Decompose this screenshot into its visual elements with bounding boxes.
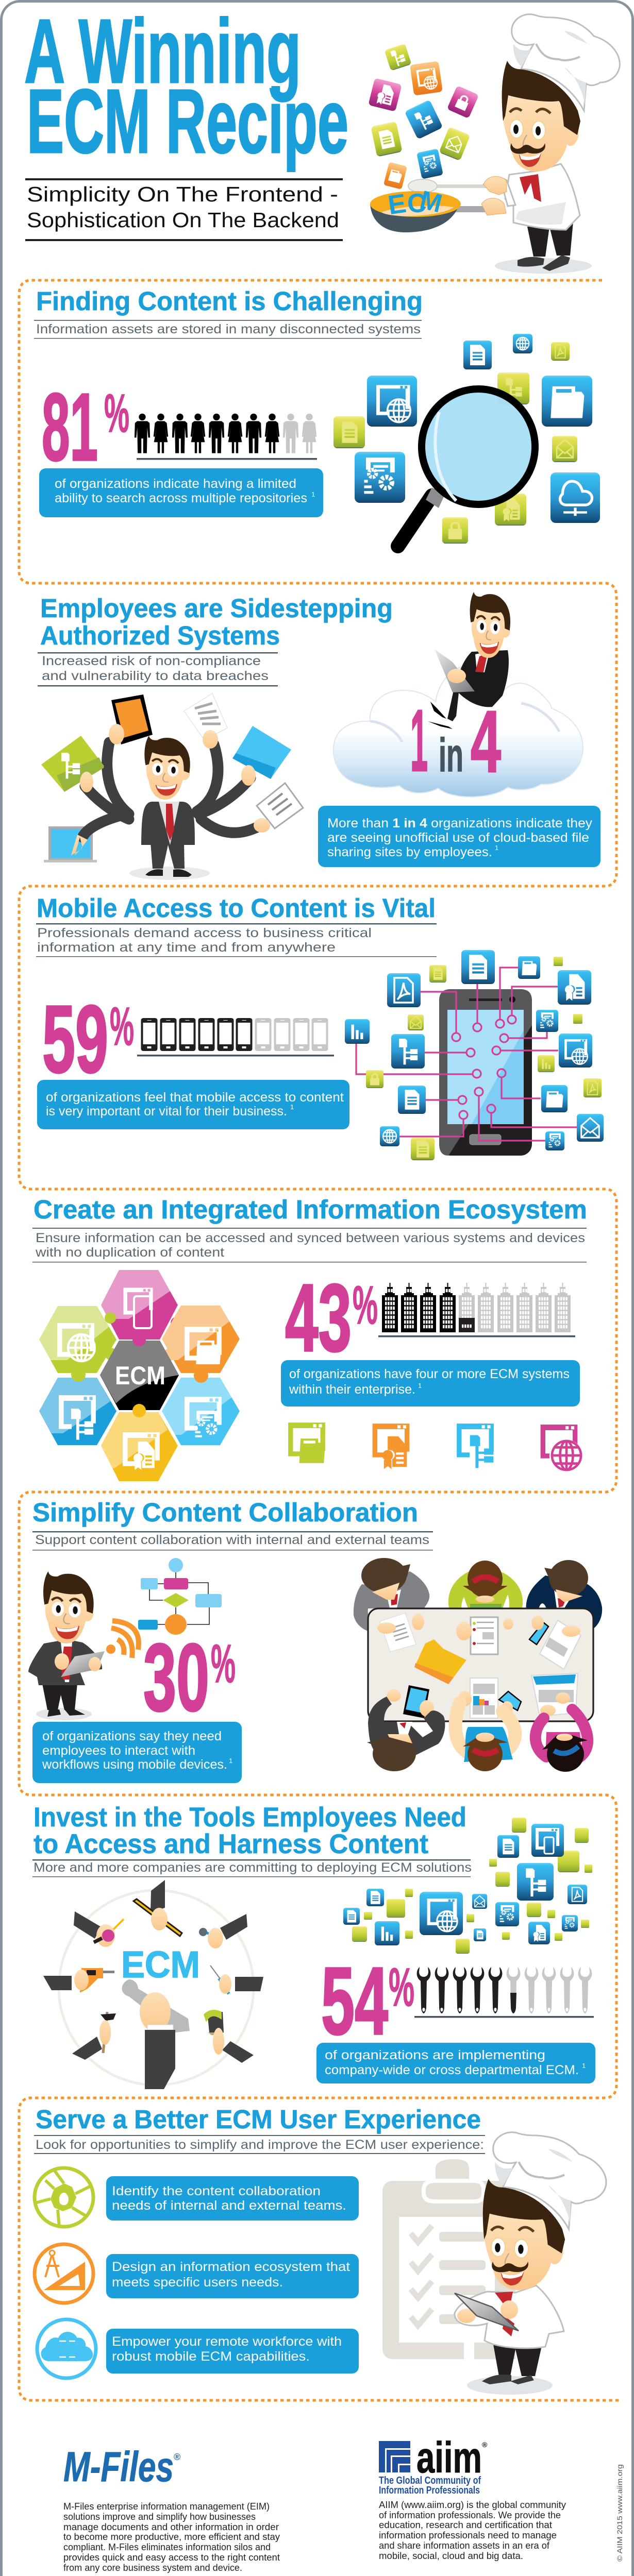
callout: Identify the content collaboration: [112, 2184, 321, 2198]
logo: AIIM: ®: [482, 2441, 488, 2449]
callout: employees to interact with: [42, 1743, 195, 1758]
text block: M-Files description: compliant. M-Files eliminates information silos and: [63, 2541, 271, 2552]
stat: 59 percent: 59: [42, 986, 108, 1093]
diagram: ECM tools circle: ECM: [121, 1944, 200, 1986]
subheading: [32, 1228, 587, 1262]
icon cluster: [343, 1818, 592, 1954]
text block: AIIM description: [379, 2499, 566, 2561]
person: pink top: [536, 1709, 588, 1772]
tool: paint brush: [204, 2010, 254, 2063]
subheading: Information assets are stored in many disconnected systems: [36, 322, 421, 336]
stat: 1 in 4: in: [439, 729, 463, 782]
subheading: and vulnerability to data breaches: [42, 669, 269, 683]
subheading: Ensure information can be accessed and synced between various systems and devices: [36, 1231, 585, 1245]
icon: chef cooking ECM: [368, 14, 620, 274]
subheading: information at any time and from anywhere: [37, 940, 336, 955]
text block: M-Files description: from any core business system and device.: [63, 2562, 242, 2573]
heading: to Access and Harness Content: [34, 1829, 428, 1859]
title: ECM Recipe: [27, 71, 348, 172]
icon: cloud: [37, 2319, 96, 2378]
text block: AIIM description: information professionals need to manage: [379, 2530, 557, 2540]
logo: M-Files: M-Files: [63, 2444, 174, 2490]
callout: Design an information ecosystem that: [112, 2260, 350, 2274]
heading: Serve a Better ECM User Experience: [36, 2105, 481, 2134]
callout: robust mobile ECM capabilities.: [112, 2349, 310, 2364]
hands on table: [377, 1614, 580, 1717]
panel: finding content: [34, 286, 600, 546]
callout: [281, 1360, 580, 1406]
person: gray suit: [354, 1558, 429, 1634]
callout: 1: [418, 1382, 422, 1389]
subtitle: [25, 178, 343, 241]
tool: screwdriver: [210, 1965, 263, 1994]
callout: 1: [495, 844, 498, 852]
icon: checklist clipboard: [382, 2159, 515, 2359]
text block: M-Files description: to become more productive, more efficient and stay: [63, 2531, 280, 2542]
subheading: [36, 923, 437, 957]
tool: level: [134, 1880, 182, 1936]
icon tiles around phone: [345, 950, 604, 1160]
subheading: Look for opportunities to simplify and improve the ECM user experience:: [36, 2138, 484, 2152]
text block: M-Files description: [63, 2501, 280, 2573]
icon: multitasking employee: [41, 693, 303, 880]
stat: 1 in 4: 4: [471, 693, 501, 791]
callout: is very important or vital for their business.: [46, 1104, 287, 1118]
hexagon: blue org chart: [39, 1367, 116, 1445]
wrenches pictogram 5.4 of 10: [414, 1967, 594, 2018]
subheading: [38, 652, 278, 686]
person: dark suit: [367, 1697, 445, 1771]
icon: chef with tablet: [455, 2132, 606, 2395]
person: navy suit: [526, 1560, 602, 1635]
callout: [316, 2043, 595, 2083]
heading: Finding Content is Challenging: [36, 286, 423, 316]
subheading: Increased risk of non-compliance: [42, 654, 261, 668]
callout: [106, 2254, 359, 2298]
subtitle: Sophistication On The Backend: [27, 208, 339, 232]
callout: [32, 1722, 242, 1783]
callout: [318, 806, 600, 867]
stat: 43 percent: %: [353, 1275, 378, 1335]
stat: 43 percent: 43: [285, 1265, 352, 1371]
text block: AIIM description: of information professionals. We provide the: [379, 2510, 561, 2520]
heading: [40, 594, 393, 650]
dotted serpentine section border: [19, 280, 622, 2400]
callout: sharing sites by employees.: [327, 845, 492, 859]
callout: of organizations feel that mobile access to content: [46, 1090, 344, 1105]
stat: 54 percent: %: [389, 1957, 414, 2018]
callout: of organizations indicate having a limited: [55, 477, 296, 491]
callout: of organizations are implementing: [325, 2048, 545, 2062]
hexagon: yellow certificate: [101, 1404, 178, 1481]
hexagon: green globe: [39, 1306, 117, 1373]
subtitle: Simplicity On The Frontend -: [27, 182, 338, 206]
callout: More than 1 in 4 organizations indicate they: [327, 816, 593, 831]
icon: man with tablet: [28, 1571, 139, 1720]
icon: chef cooking ECM: M: [417, 185, 445, 218]
stat: 54 percent: 54: [321, 1948, 388, 2055]
logo: AIIM: aiim: [416, 2433, 482, 2482]
hexagon: light blue gears: [162, 1368, 240, 1445]
hexagon: orange folder: [162, 1306, 240, 1373]
heading: Create an Integrated Information Ecosystem: [34, 1195, 587, 1224]
text block: M-Files description: solutions improve and simplify how businesses: [63, 2511, 256, 2522]
heading: Invest in the Tools Employees Need: [34, 1802, 466, 1833]
hexagon: central ECM: [100, 1333, 179, 1410]
panel: simplify collaboration: [28, 1498, 602, 1783]
title: [24, 1, 348, 172]
callout: 1: [229, 1757, 232, 1765]
text block: AIIM description: and share information assets in an era of: [379, 2540, 550, 2551]
person: green top: [448, 1561, 523, 1625]
people pictogram 8 of 10: [135, 414, 317, 460]
callout: of organizations have four or more ECM systems: [289, 1367, 570, 1381]
panel: invest in tools: [32, 1802, 595, 2089]
callout: ability to search across multiple repositories: [55, 491, 307, 505]
table items: [380, 1613, 581, 1718]
panel: integrated ecosystem: [32, 1195, 587, 1481]
subheading: Professionals demand access to business critical: [37, 926, 372, 940]
callout: workflows using mobile devices.: [42, 1757, 227, 1772]
logo: AIIM: Information Professionals: [379, 2485, 480, 2496]
hexagon: pink mobile: [101, 1270, 183, 1340]
logo: M-Files: ®: [174, 2452, 180, 2462]
heading: Simplify Content Collaboration: [32, 1498, 418, 1527]
icon: connected smartphone: [345, 950, 604, 1160]
diagram: ECM hexagon puzzle: [39, 1270, 240, 1481]
icon: chef cooking ECM: C: [407, 188, 427, 219]
stat: 30 percent: 30: [143, 1624, 209, 1731]
stat: 81 percent: %: [104, 383, 129, 444]
diagram: ECM tools circle: [43, 1880, 263, 2089]
heading: Authorized Systems: [40, 621, 280, 650]
icon row: [288, 1422, 582, 1472]
callout: meets specific users needs.: [112, 2275, 283, 2290]
callout: 1: [311, 490, 315, 498]
title: A Winning: [24, 1, 301, 102]
callout: 1: [582, 2062, 586, 2070]
heading: Employees are Sidestepping: [40, 594, 393, 623]
logo: AIIM: The Global Community of: [379, 2475, 481, 2486]
diagram: workflow: [138, 1558, 222, 1635]
tool: pliers: [199, 1914, 247, 1948]
copyright note: © AIIM 2015 www.aiim.org: [615, 2464, 624, 2562]
callout: [39, 468, 323, 517]
buildings pictogram 4.3 of 10: [378, 1283, 575, 1337]
text block: M-Files description: M-Files enterprise information management (EIM): [63, 2501, 270, 2512]
text block: M-Files description: provides quick and easy access to the right content: [63, 2552, 280, 2563]
text block: M-Files description: manage documents and other information in order: [63, 2521, 279, 2532]
callout: needs of internal and external teams.: [112, 2198, 346, 2213]
tool: drill: [43, 1968, 114, 1993]
callout: within their enterprise.: [289, 1382, 415, 1397]
panel: mobile access: [36, 893, 604, 1160]
tool: wrench: [122, 1979, 190, 2089]
logo: AIIM: [379, 2433, 488, 2496]
heading: [34, 1802, 466, 1859]
icon: chef cooking ECM: E: [386, 189, 408, 221]
subheading: with no duplication of content: [35, 1245, 224, 1260]
person: blue top: [456, 1703, 515, 1771]
icon: tiles and magnifier: [333, 334, 600, 546]
icon: collaboration wheel: [35, 2168, 93, 2227]
callout: are seeing unofficial use of cloud-based file: [327, 831, 589, 845]
subheading: More and more companies are committing to deploying ECM solutions: [34, 1860, 472, 1875]
stat: 1 in 4: 1: [410, 692, 428, 790]
icon: design tools: [35, 2244, 93, 2303]
text block: AIIM description: AIIM (www.aiim.org) is the global community: [379, 2499, 566, 2510]
icon: team meeting top view: [354, 1558, 602, 1772]
stat: 1 in 4: [410, 692, 501, 791]
stat: 59 percent: %: [110, 996, 134, 1057]
callout: [106, 2329, 359, 2374]
callout: [106, 2176, 359, 2221]
heading: Mobile Access to Content is Vital: [37, 893, 436, 923]
text block: AIIM description: education, research and certification that: [379, 2519, 552, 2530]
text block: AIIM description: mobile, social, cloud and big data.: [379, 2550, 523, 2561]
hexagon: central ECM: ECM: [115, 1361, 165, 1390]
floating icons: [368, 44, 479, 190]
icon: cloud with laptop user: [333, 592, 583, 797]
callout: company-wide or cross departmental ECM.: [325, 2063, 579, 2077]
callout: of organizations say they need: [42, 1729, 222, 1743]
table: [368, 1608, 593, 1721]
callout: [37, 1080, 349, 1129]
tool: hammer: [72, 2012, 116, 2060]
callout: 1: [290, 1103, 294, 1111]
stat: 30 percent: %: [211, 1634, 236, 1694]
panel: employees sidestepping: [38, 592, 600, 880]
callout: Empower your remote workforce with: [112, 2334, 342, 2349]
tool: tape measure: [74, 1911, 124, 1947]
panel: better user experience: [34, 2105, 606, 2395]
stat: 81 percent: 81: [42, 374, 98, 481]
subheading: Support content collaboration with internal and external teams: [35, 1533, 429, 1547]
phones pictogram 6 of 10: [137, 1018, 334, 1056]
